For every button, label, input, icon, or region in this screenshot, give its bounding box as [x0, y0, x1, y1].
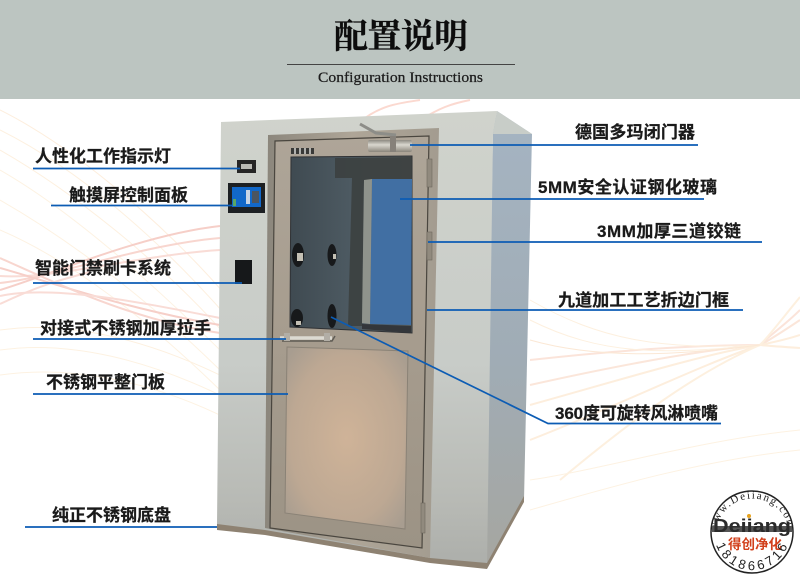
hinges — [427, 159, 432, 187]
door lower panel — [285, 347, 408, 529]
label: door panel: 不锈钢平整门板 — [46, 373, 165, 392]
air shower cabinet — [217, 111, 532, 569]
logo stamp: Deiiang — [713, 516, 791, 536]
header band — [0, 0, 800, 99]
indicator — [237, 160, 256, 173]
decorative curves — [0, 100, 800, 510]
door badge — [291, 148, 314, 154]
door handle — [280, 333, 335, 341]
window — [290, 156, 412, 333]
door frame — [265, 128, 439, 558]
header rule — [287, 64, 515, 65]
logo stamp: 181866716 — [716, 542, 786, 570]
label: hinges: 3MM加厚三道铰链 — [597, 221, 741, 241]
logo stamp: www.Deiiang.com — [712, 492, 794, 530]
title: 配置说明 — [334, 18, 468, 56]
label: nozzle: 360度可旋转风淋喷嘴 — [555, 403, 718, 423]
label: door frame: 九道加工工艺折边门框 — [558, 290, 729, 310]
door leaf — [270, 136, 429, 548]
label: door closer: 德国多玛闭门器 — [575, 122, 695, 142]
cabinet base — [217, 496, 524, 569]
nozzles — [291, 243, 336, 328]
logo stamp — [710, 490, 794, 574]
label: card system: 智能门禁刷卡系统 — [35, 258, 171, 278]
label: handle: 对接式不锈钢加厚拉手 — [40, 318, 211, 338]
label: indicator light: 人性化工作指示灯 — [35, 146, 171, 166]
blue rear wall — [370, 179, 412, 325]
logo stamp: 得创净化 — [728, 536, 782, 552]
label: touch panel: 触摸屏控制面板 — [69, 186, 188, 205]
label: chassis: 纯正不锈钢底盘 — [52, 505, 171, 525]
subtitle: Configuration Instructions — [318, 70, 483, 86]
touch screen — [228, 183, 265, 213]
leader lines — [25, 145, 762, 527]
cabinet side — [485, 111, 532, 568]
card reader — [235, 260, 252, 284]
label: glass: 5MM安全认证钢化玻璃 — [538, 177, 717, 197]
cabinet front — [217, 111, 497, 568]
door closer — [360, 124, 412, 152]
